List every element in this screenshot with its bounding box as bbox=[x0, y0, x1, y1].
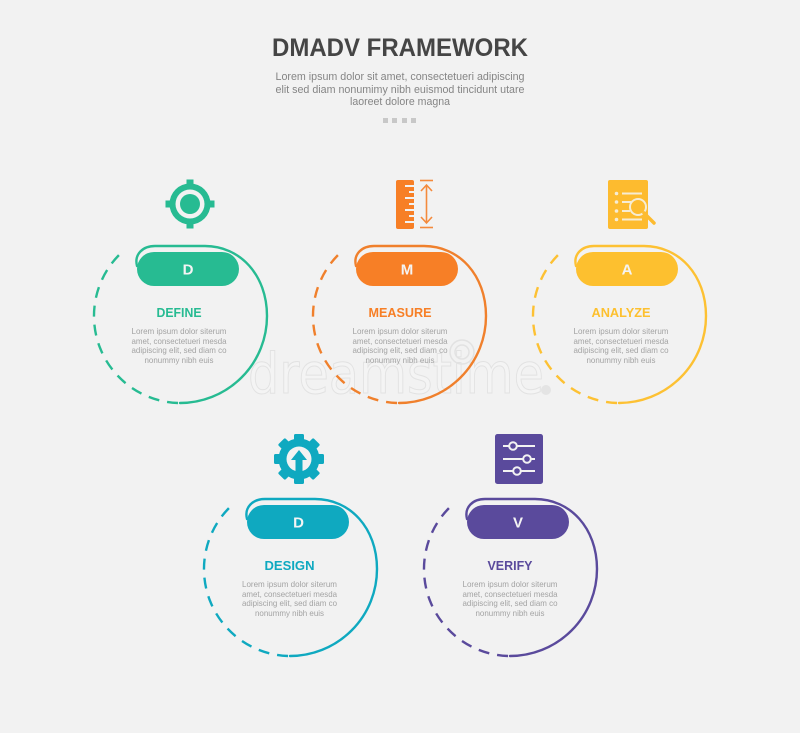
pill: M bbox=[356, 252, 458, 286]
text: design body: amet, consectetueri mesda bbox=[242, 589, 337, 599]
outline: verify circle bbox=[424, 499, 597, 656]
text: measure body: nonummy nibh euis bbox=[366, 355, 434, 365]
letter: D: D bbox=[293, 514, 304, 532]
text: analyze body: amet, consectetueri mesda bbox=[574, 336, 669, 346]
pill: D bbox=[137, 252, 239, 286]
outline: analyze circle bbox=[533, 246, 706, 403]
outline: measure circle bbox=[313, 246, 486, 403]
text: define body: adipiscing elit, sed diam co bbox=[132, 345, 227, 355]
heading: measure: MEASURE bbox=[368, 305, 432, 320]
panel: measure bbox=[313, 180, 486, 403]
panel: design bbox=[204, 434, 377, 656]
letter: D: D bbox=[183, 262, 194, 278]
outline: design circle bbox=[204, 499, 377, 656]
subtitle bbox=[276, 71, 525, 108]
text: verify body: adipiscing elit, sed diam co bbox=[462, 598, 558, 608]
panel: verify bbox=[424, 434, 597, 656]
text: define body bbox=[132, 326, 227, 365]
pill: V bbox=[467, 505, 569, 539]
text: verify body: amet, consectetueri mesda bbox=[462, 589, 558, 599]
text: design body: adipiscing elit, sed diam co bbox=[242, 598, 337, 608]
text: analyze body: nonummy nibh euis bbox=[586, 355, 656, 365]
panel: analyze bbox=[533, 180, 706, 403]
heading: analyze: ANALYZE bbox=[592, 305, 651, 320]
text: define body: amet, consectetueri mesda bbox=[132, 336, 227, 346]
text: verify body: nonummy nibh euis bbox=[476, 608, 544, 618]
watermark: dreamstime bbox=[248, 342, 544, 407]
subtitle: laoreet dolore magna bbox=[350, 96, 450, 108]
text: design body: nonummy nibh euis bbox=[255, 608, 324, 618]
text: analyze body bbox=[574, 326, 669, 365]
icon: document search bbox=[608, 180, 654, 229]
text: verify body: Lorem ipsum dolor siterum bbox=[462, 579, 558, 589]
text: verify body bbox=[462, 579, 558, 618]
pill: D bbox=[247, 505, 349, 539]
outline: define circle bbox=[94, 246, 267, 403]
heading: define: DEFINE bbox=[156, 305, 202, 320]
title dots bbox=[383, 118, 416, 123]
text: analyze body: adipiscing elit, sed diam co bbox=[574, 345, 669, 355]
icon: target bbox=[166, 180, 214, 228]
letter: M: M bbox=[401, 262, 413, 278]
text: define body: Lorem ipsum dolor siterum bbox=[132, 326, 226, 336]
text: measure body: Lorem ipsum dolor siterum bbox=[352, 326, 448, 336]
subtitle: Lorem ipsum dolor sit amet, consectetueri adipiscing bbox=[276, 71, 525, 83]
text: design body: Lorem ipsum dolor siterum bbox=[242, 579, 337, 589]
pill: A bbox=[576, 252, 678, 286]
icon: sliders bbox=[495, 434, 543, 484]
text: measure body: adipiscing elit, sed diam co bbox=[352, 345, 448, 355]
title: DMADV FRAMEWORK bbox=[272, 34, 528, 62]
heading: verify: VERIFY bbox=[488, 558, 533, 573]
icon: ruler and arrow bbox=[396, 180, 433, 229]
text: analyze body: Lorem ipsum dolor siterum bbox=[574, 326, 668, 336]
letter: A: A bbox=[622, 262, 633, 278]
panel: define bbox=[94, 180, 267, 403]
letter: V: V bbox=[513, 514, 523, 532]
subtitle: elit sed diam nonumimy nibh euismod tincidunt utare bbox=[276, 84, 525, 96]
icon: gear with arrow bbox=[274, 434, 324, 484]
text: measure body bbox=[352, 326, 448, 365]
text: design body bbox=[242, 579, 337, 618]
text: define body: nonummy nibh euis bbox=[144, 355, 214, 365]
text: measure body: amet, consectetueri mesda bbox=[352, 336, 448, 346]
heading: design: DESIGN bbox=[264, 558, 314, 573]
